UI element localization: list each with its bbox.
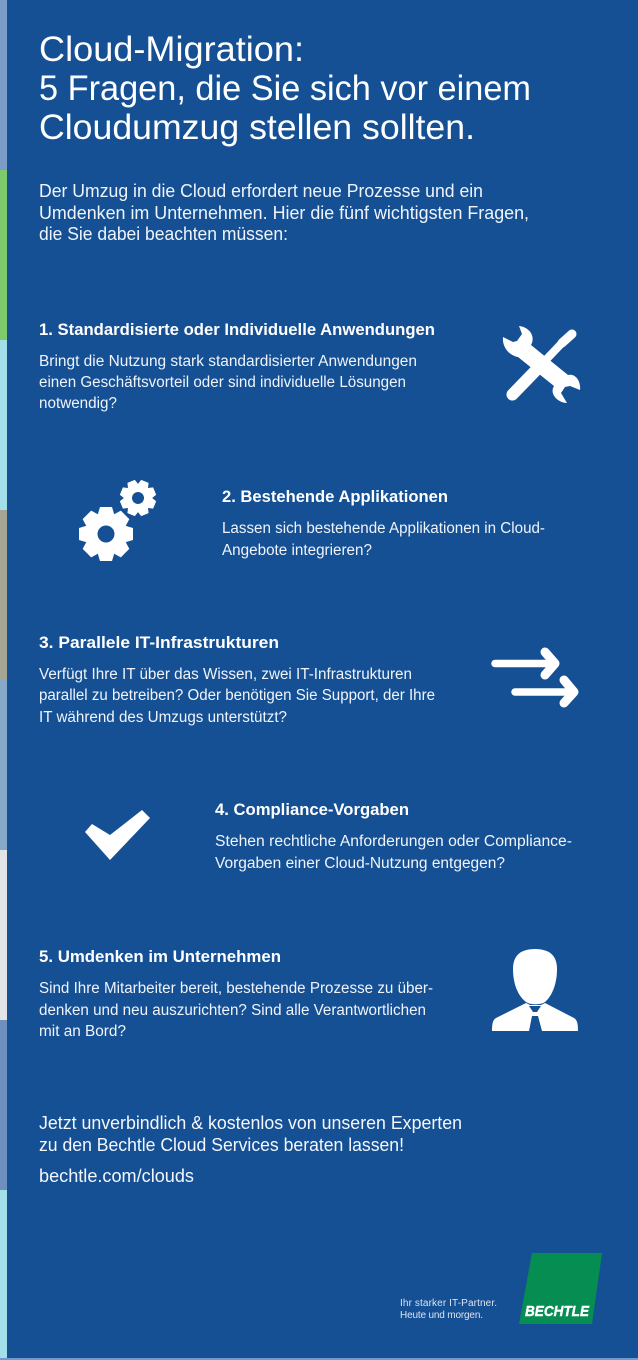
body 5: Sind Ihre Mitarbeiter bereit, bestehende Prozesse zu über-	[39, 980, 433, 997]
body 1: Bringt die Nutzung stark standardisierter Anwendungen	[39, 353, 417, 370]
left colour strip	[0, 0, 7, 1360]
intro text: Umdenken im Unternehmen. Hier die fünf wichtigsten Fragen,	[39, 203, 529, 223]
call to action: Jetzt unverbindlich & kostenlos von unseren Experten	[39, 1112, 462, 1133]
intro text: die Sie dabei beachten müssen:	[39, 224, 288, 244]
body 5: mit an Bord?	[39, 1023, 126, 1040]
icon: arrows	[495, 652, 574, 703]
title: Cloudumzug stellen sollten.	[39, 108, 475, 147]
tagline: Heute und morgen.	[400, 1310, 483, 1321]
icon: tools	[503, 326, 580, 403]
body 4: Vorgaben einer Cloud-Nutzung entgegen?	[215, 855, 505, 872]
icon: gears	[79, 474, 162, 561]
body 3	[39, 666, 435, 726]
tagline: Ihr starker IT-Partner.	[400, 1298, 497, 1309]
heading 3: 3. Parallele IT-Infrastrukturen	[39, 633, 279, 652]
body 2: Lassen sich bestehende Applikationen in Cloud-	[222, 520, 545, 537]
icon: check mark	[85, 810, 150, 860]
title	[39, 30, 531, 147]
heading 1: 1. Standardisierte oder Individuelle Anwendungen	[39, 320, 435, 339]
tagline	[400, 1298, 497, 1321]
body 1	[39, 353, 417, 412]
body 2	[222, 520, 545, 559]
body 5: denken und neu auszurichten? Sind alle Verantwortlichen	[39, 1002, 426, 1019]
body 3: IT während des Umzugs unterstützt?	[39, 709, 287, 726]
body 3: parallel zu betreiben? Oder benötigen Sie Support, der Ihre	[39, 687, 435, 704]
logo: Bechtle	[519, 1253, 602, 1324]
body 2: Angebote integrieren?	[222, 542, 372, 559]
intro text	[39, 181, 529, 244]
body 1: einen Geschäftsvorteil oder sind individuelle Lösungen	[39, 374, 406, 391]
section 1	[39, 320, 435, 412]
body 1: notwendig?	[39, 395, 117, 412]
heading 2: 2. Bestehende Applikationen	[222, 487, 448, 506]
title: Cloud-Migration:	[39, 30, 304, 69]
call to action: bechtle.com/clouds	[39, 1165, 194, 1186]
heading 5: 5. Umdenken im Unternehmen	[39, 947, 281, 966]
logo: Bechtle: BECHTLE	[525, 1303, 590, 1320]
section 5	[39, 947, 433, 1040]
section 3	[39, 633, 435, 726]
body 3: Verfügt Ihre IT über das Wissen, zwei IT-Infrastrukturen	[39, 666, 412, 683]
section 2	[222, 487, 545, 559]
body 4	[215, 833, 572, 872]
section 4	[215, 800, 572, 872]
intro text: Der Umzug in die Cloud erfordert neue Prozesse und ein	[39, 181, 483, 201]
heading 4: 4. Compliance-Vorgaben	[215, 800, 409, 819]
call to action: zu den Bechtle Cloud Services beraten lassen!	[39, 1134, 404, 1155]
body 5	[39, 980, 433, 1040]
body 4: Stehen rechtliche Anforderungen oder Compliance-	[215, 833, 572, 850]
title: 5 Fragen, die Sie sich vor einem	[39, 69, 531, 108]
icon: business person	[492, 949, 578, 1031]
call to action	[39, 1112, 462, 1186]
